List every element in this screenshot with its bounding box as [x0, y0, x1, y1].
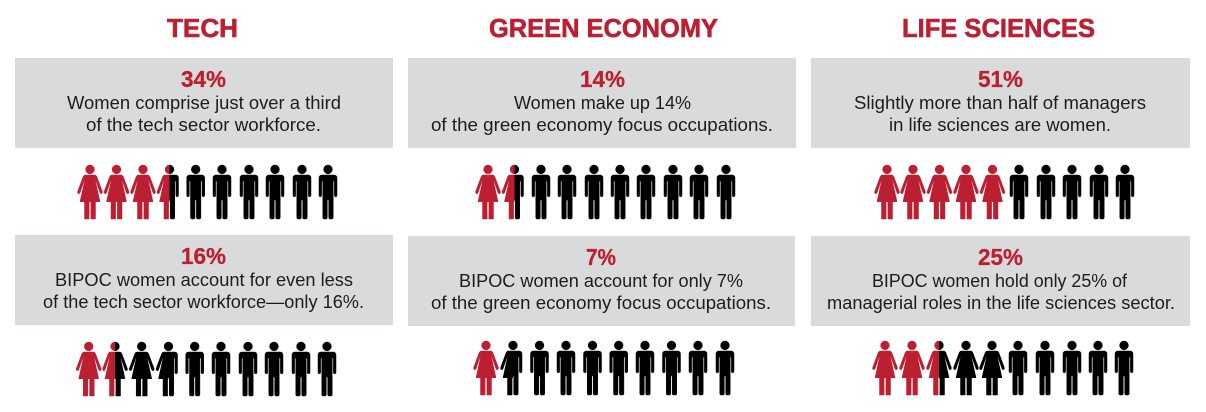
pictogram: life sciences BIPOC women 25% — [873, 341, 1133, 395]
pictogram: green economy BIPOC women 7% — [474, 341, 734, 395]
panel: green economy BIPOC women: 7% — [586, 244, 616, 270]
panel: green economy BIPOC women — [408, 236, 795, 326]
pictogram: tech BIPOC women 16% — [76, 342, 336, 396]
panel: life sciences BIPOC women: managerial roles in the life sciences sector. — [827, 293, 1175, 313]
panel: tech BIPOC women: 16% — [181, 243, 226, 269]
panel: tech women — [15, 58, 393, 148]
panel: life sciences BIPOC women — [811, 236, 1190, 326]
panel: life sciences BIPOC women: 25% — [978, 244, 1023, 270]
panel: green economy women — [408, 58, 796, 148]
panel: green economy women: Women make up 14% — [514, 93, 691, 113]
pictogram: green economy women 14% — [476, 165, 735, 219]
panel: tech BIPOC women: of the tech sector workforce—only 16%. — [43, 292, 364, 312]
panel: life sciences women — [811, 58, 1190, 148]
panel: green economy BIPOC women: BIPOC women account for only 7% — [459, 271, 743, 291]
panel: life sciences women: in life sciences are women. — [889, 115, 1111, 135]
panel: green economy BIPOC women: of the green economy focus occupations. — [431, 293, 771, 313]
pictogram: life sciences women 51% — [875, 165, 1134, 219]
pictogram: tech women 34% — [78, 165, 337, 219]
column: life sciences — [811, 13, 1190, 395]
panel: life sciences women: 51% — [978, 66, 1023, 92]
column: tech — [15, 13, 393, 396]
panel: tech BIPOC women — [15, 235, 393, 325]
heading: green economy: GREEN ECONOMY — [489, 13, 718, 43]
panel: green economy women: 14% — [580, 66, 625, 92]
panel: tech women: Women comprise just over a third — [67, 93, 341, 113]
panel: life sciences women: Slightly more than half of managers — [854, 93, 1146, 113]
panel: life sciences BIPOC women: BIPOC women hold only 25% of — [872, 271, 1128, 291]
panel: tech women: 34% — [181, 66, 226, 92]
column: green economy — [408, 13, 796, 395]
heading: tech: TECH — [167, 13, 238, 43]
panel: tech women: of the tech sector workforce. — [86, 115, 321, 135]
panel: tech BIPOC women: BIPOC women account for even less — [55, 270, 353, 290]
heading: life sciences: LIFE SCIENCES — [902, 13, 1095, 43]
panel: green economy women: of the green economy focus occupations. — [431, 115, 773, 135]
